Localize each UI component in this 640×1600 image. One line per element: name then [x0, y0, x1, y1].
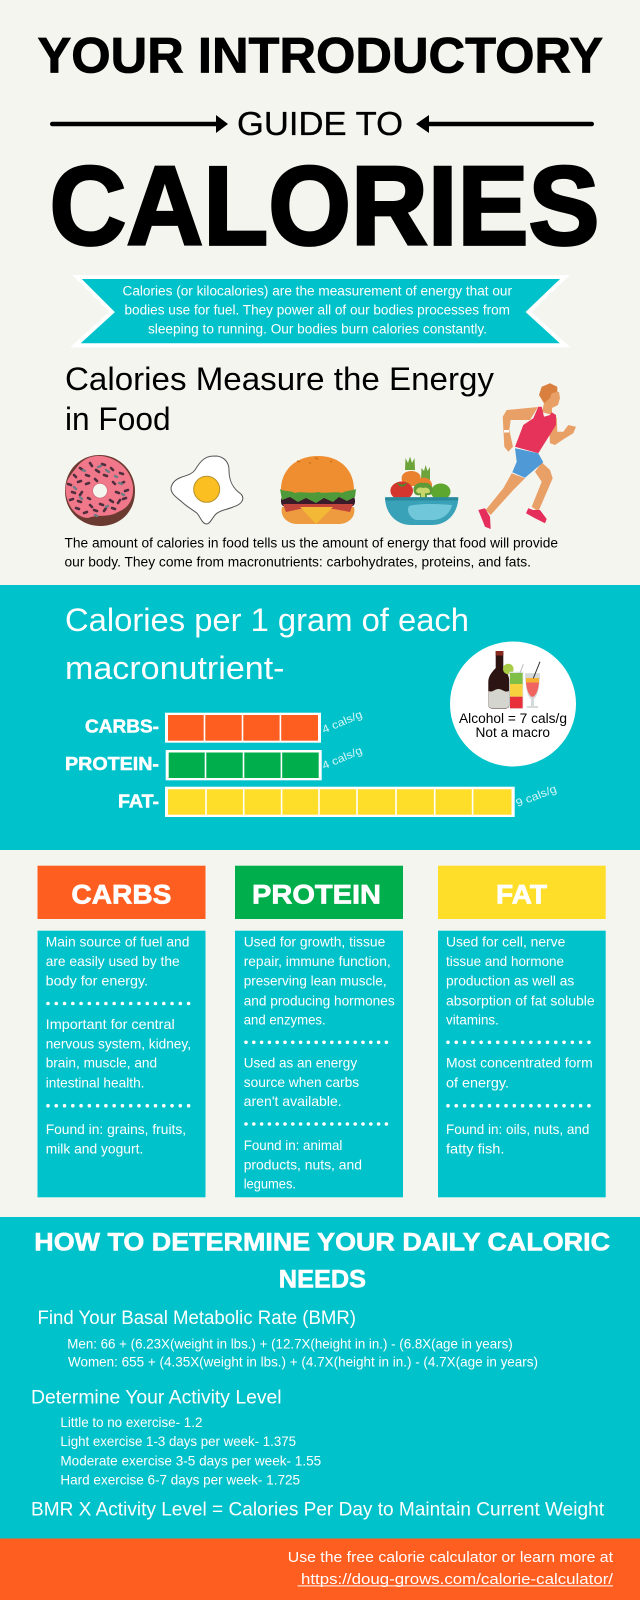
- back shoe: [478, 508, 491, 529]
- value label: protein: 4 cals/g: [320, 745, 364, 772]
- icon: bottle and cocktails: [488, 651, 540, 709]
- shorts: [512, 448, 543, 478]
- icon: fried egg: [171, 456, 243, 524]
- bar: carbs 4 cells: [165, 713, 321, 743]
- banner text: Calories (or kilocalories) are the measurement of energy that our: [122, 283, 512, 298]
- body: carbs: milk and yogurt.: [46, 1140, 143, 1156]
- value label: fat: 9 cals/g: [514, 783, 558, 810]
- footer: [0, 1538, 640, 1600]
- list: activity multipliers: Little to no exercise- 1.2: [60, 1414, 203, 1430]
- list: activity multipliers: Light exercise 1-3 days per week- 1.375: [60, 1433, 296, 1449]
- body: protein: [235, 931, 403, 1197]
- body: fat: tissue and hormone: [446, 953, 564, 969]
- body: protein: Used for growth, tissue: [244, 934, 386, 950]
- heading: calories measure the energy in food: in Food: [65, 401, 171, 437]
- banner text: [122, 283, 512, 337]
- intro ribbon banner: [76, 277, 565, 345]
- body: protein: and enzymes.: [244, 1012, 326, 1028]
- body: protein: preserving lean muscle,: [244, 972, 387, 988]
- body: carbs: Important for central: [46, 1016, 175, 1032]
- header: protein: [235, 866, 403, 919]
- heading: calories per gram: Calories per 1 gram of each: [65, 602, 469, 638]
- footer text: Use the free calorie calculator or learn more at: [288, 1549, 614, 1566]
- front leg: [532, 462, 553, 512]
- subtitle: guide to: GUIDE TO: [237, 106, 403, 143]
- paragraph: amount of calories: our body. They come from macronutrients: carbohydrates, proteins, and fats.: [64, 555, 531, 571]
- body: protein: products, nuts, and: [244, 1156, 362, 1172]
- body: carbs: Main source of fuel and: [46, 934, 189, 950]
- formulas: bmr: [67, 1335, 538, 1370]
- bar: fat 9 cells: [165, 787, 515, 817]
- callout text: Not a macro: [476, 725, 550, 740]
- panel: protein: [235, 866, 403, 1197]
- list: activity multipliers: Hard exercise 6-7 days per week- 1.725: [60, 1471, 300, 1487]
- icon: donut: [65, 455, 135, 526]
- title: calories: CALORIES: [50, 143, 600, 268]
- back leg: [486, 473, 525, 515]
- bar: protein 4 cells: [166, 750, 322, 780]
- body: fat: [438, 931, 606, 1197]
- left arm: [503, 407, 538, 452]
- banner text: sleeping to running. Our bodies burn calories constantly.: [148, 322, 487, 337]
- body: fat: fatty fish.: [446, 1140, 504, 1156]
- body: fat: Most concentrated form: [446, 1055, 593, 1071]
- value label: carbs: 4 cals/g: [320, 709, 364, 736]
- body: protein: legumes.: [244, 1176, 296, 1192]
- panel: carbs: [38, 866, 206, 1197]
- formulas: bmr: Women: 655 + (4.35X(weight in lbs.) + (4.7X(height in in.) - (4.7X(age in years): [68, 1354, 538, 1370]
- icon: vegetable bowl: [385, 456, 458, 525]
- header: protein: PROTEIN: [252, 879, 381, 909]
- subheading: activity level: Determine Your Activity Level: [31, 1387, 282, 1408]
- list: activity multipliers: Moderate exercise 3-5 days per week- 1.55: [60, 1452, 321, 1468]
- body: protein: Found in: animal: [244, 1137, 342, 1153]
- header: fat: [438, 866, 606, 919]
- icon: burger: [280, 456, 356, 524]
- panel: fat: [438, 866, 606, 1197]
- title: your introductory: YOUR INTRODUCTORY: [38, 27, 603, 83]
- heading: calories per gram: [65, 602, 469, 686]
- body: protein: and producing hormones: [244, 992, 395, 1008]
- body: fat: production as well as: [446, 972, 574, 988]
- body: carbs: Found in: grains, fruits,: [46, 1121, 186, 1137]
- body: carbs: intestinal health.: [46, 1074, 145, 1090]
- front shoe: [526, 508, 547, 523]
- title block: [38, 27, 603, 268]
- body: carbs: nervous system, kidney,: [46, 1035, 191, 1051]
- body: protein: aren't available.: [244, 1093, 342, 1109]
- body: fat: Used for cell, nerve: [446, 934, 566, 950]
- arrow: right pointing left: [416, 115, 594, 133]
- list: activity multipliers: [60, 1414, 321, 1487]
- subheading: bmr: Find Your Basal Metabolic Rate (BMR): [38, 1308, 356, 1329]
- heading: calories measure the energy in food: [65, 361, 495, 437]
- body: fat: Found in: oils, nuts, and: [446, 1121, 589, 1137]
- callout: alcohol: [450, 642, 576, 766]
- body: carbs: body for energy.: [46, 972, 148, 988]
- tank top: [515, 407, 556, 453]
- formula: calories per day: BMR X Activity Level = Calories Per Day to Maintain Current Weight: [31, 1498, 605, 1520]
- heading: how to determine: [34, 1229, 610, 1294]
- bar label: carbs: CARBS-: [85, 717, 159, 737]
- body: protein: source when carbs: [244, 1074, 359, 1090]
- body: carbs: [38, 931, 206, 1197]
- header: fat: FAT: [496, 879, 548, 909]
- heading: calories measure the energy in food: Calories Measure the Energy: [65, 361, 495, 397]
- header: carbs: [38, 866, 206, 919]
- header: carbs: CARBS: [71, 879, 171, 909]
- panel: calories per gram: [0, 585, 640, 850]
- callout text: [459, 711, 567, 740]
- footer link: https://doug-grows.com/calorie-calculator/: [301, 1571, 614, 1588]
- body: fat: of energy.: [446, 1074, 509, 1090]
- body: carbs: brain, muscle, and: [46, 1055, 157, 1071]
- bar label: fat: FAT-: [118, 791, 159, 811]
- banner text: bodies use for fuel. They power all of our bodies processes from: [124, 303, 510, 318]
- body: fat: vitamins.: [446, 1012, 499, 1028]
- neck and face: [542, 390, 560, 415]
- body: carbs: are easily used by the: [46, 953, 180, 969]
- body: protein: repair, immune function,: [244, 953, 391, 969]
- callout text: Alcohol = 7 cals/g: [459, 711, 567, 726]
- paragraph: amount of calories: [64, 535, 558, 571]
- panel: daily caloric needs: [0, 1217, 640, 1539]
- bar label: protein: PROTEIN-: [65, 754, 159, 774]
- heading: calories per gram: macronutrient-: [65, 650, 284, 686]
- hair: [539, 383, 557, 403]
- arrow: left pointing right: [50, 115, 228, 133]
- heading: how to determine: NEEDS: [279, 1266, 366, 1294]
- body: fat: absorption of fat soluble: [446, 992, 595, 1008]
- paragraph: amount of calories: The amount of calories in food tells us the amount of energy that food will provide: [64, 535, 558, 551]
- right arm: [549, 417, 576, 445]
- formulas: bmr: Men: 66 + (6.23X(weight in lbs.) + (12.7X(height in in.) - (6.8X(age in years): [67, 1335, 513, 1351]
- icon: runner: [478, 383, 576, 529]
- body: protein: Used as an energy: [244, 1055, 357, 1071]
- heading: how to determine: HOW TO DETERMINE YOUR DAILY CALORIC: [34, 1229, 610, 1257]
